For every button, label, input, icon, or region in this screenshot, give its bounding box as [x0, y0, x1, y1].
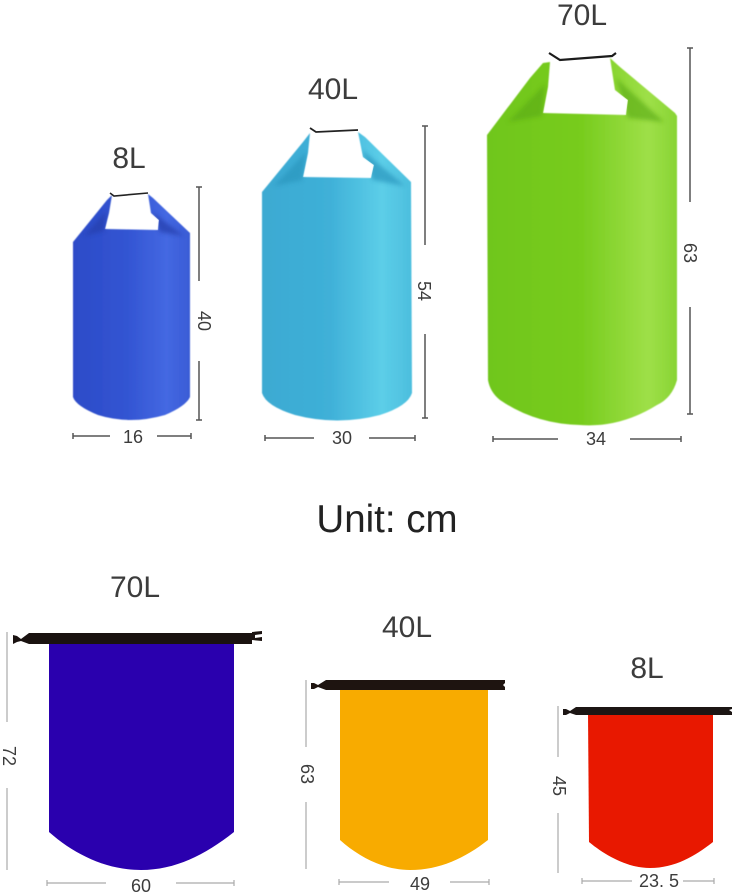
dimension: 8L flat height and width: [549, 706, 714, 891]
bag body: [262, 132, 412, 420]
dimension: 70L flat height and width: [0, 632, 234, 895]
size label 40L bottom: 40L: [382, 611, 432, 644]
dimension: 8L rolled height and width: [73, 187, 214, 447]
roll-top strap: [311, 680, 505, 690]
roll-top strap: [563, 707, 732, 715]
width 30: 30: [332, 428, 352, 448]
buckle strap: [110, 193, 148, 196]
size label 40L top: 40L: [308, 73, 358, 106]
height 63: 63: [297, 764, 317, 784]
unit caption: Unit: cm: [316, 498, 458, 541]
height 54: 54: [414, 281, 434, 301]
height 45: 45: [549, 776, 569, 796]
width 23.5: 23. 5: [639, 871, 679, 891]
buckle strap: [310, 128, 358, 132]
bag body: [588, 713, 713, 868]
dimension: 70L rolled height and width: [493, 48, 700, 449]
bag body: [49, 642, 234, 870]
bag body: [340, 688, 488, 870]
bag body: [73, 194, 190, 420]
size label 8L bottom: 8L: [630, 652, 664, 685]
rolled bag: 8L blue: [73, 193, 190, 420]
roll fold shading: [86, 213, 182, 236]
roll fold shading: [274, 150, 405, 186]
height 63: 63: [680, 243, 700, 263]
width 16: 16: [123, 427, 143, 447]
rolled bag: 70L green: [487, 53, 677, 425]
buckle strap: [549, 53, 616, 60]
bag body: [487, 58, 677, 425]
width 34: 34: [586, 429, 606, 449]
flat bag: 8L red: [563, 707, 732, 868]
size label 70L bottom: 70L: [110, 571, 160, 604]
roll-top strap: [13, 631, 262, 644]
flat bag: 70L navy: [13, 631, 262, 870]
rolled bag: 40L cyan: [262, 128, 412, 420]
flat bag: 40L orange: [311, 680, 505, 870]
height 40: 40: [194, 311, 214, 331]
size label 8L top: 8L: [112, 142, 146, 175]
dimension: 40L rolled height and width: [265, 126, 434, 448]
roll fold shading: [508, 78, 664, 122]
dimension: 40L flat height and width: [297, 680, 489, 894]
width 49: 49: [410, 874, 430, 894]
